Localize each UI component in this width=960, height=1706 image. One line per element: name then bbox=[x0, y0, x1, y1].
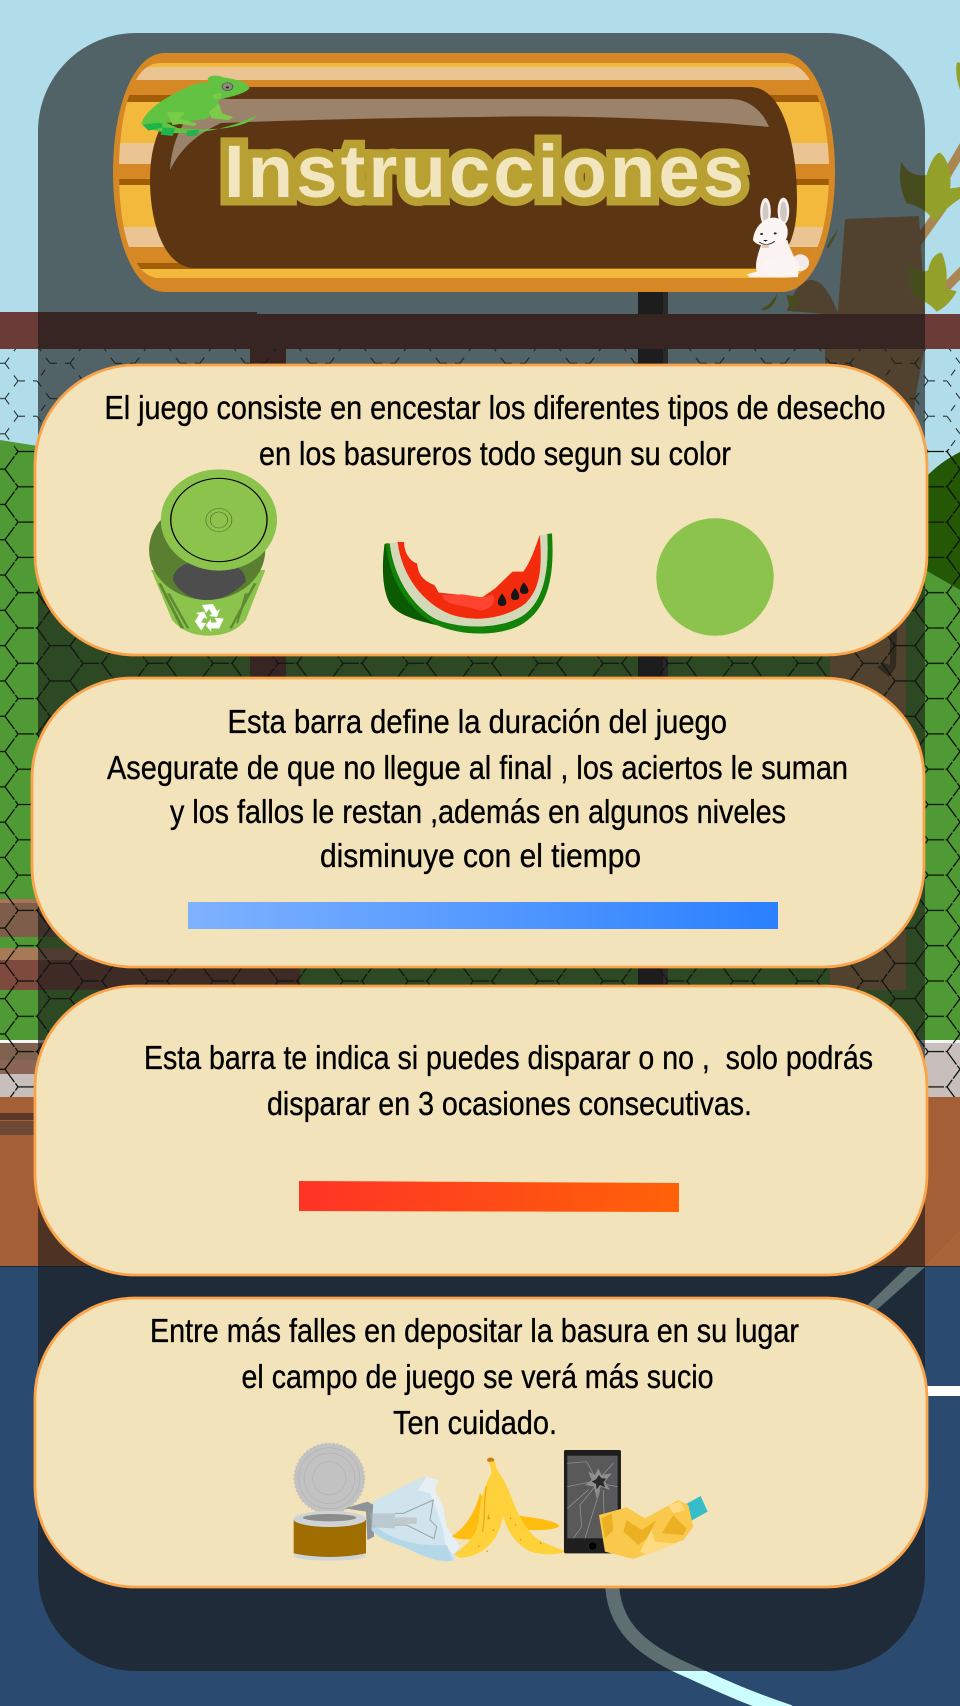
sign frame bbox=[113, 53, 835, 292]
panel box bbox=[35, 1298, 927, 1587]
blue time bar bbox=[188, 902, 778, 929]
sign stripes bbox=[119, 63, 829, 278]
court wall bands bbox=[0, 1040, 960, 1097]
title sign bbox=[100, 53, 860, 292]
fence posts bbox=[250, 292, 668, 1048]
instruction text: Entre más falles en depositar la basura en su lugar bbox=[150, 1313, 799, 1350]
icon: green circle bbox=[656, 518, 774, 636]
title text: Instrucciones bbox=[224, 130, 744, 213]
instruction text bbox=[150, 1313, 799, 1442]
icon: crushed plastic bottle bbox=[599, 1496, 708, 1559]
icon: broken light bulb bbox=[345, 1477, 460, 1561]
sign brown plate bbox=[150, 87, 797, 268]
instruction text bbox=[107, 704, 848, 875]
panel: game goal bbox=[35, 365, 927, 655]
plate highlight bbox=[170, 99, 769, 170]
red shot bar bbox=[299, 1181, 679, 1212]
blue court floor bbox=[0, 1266, 960, 1706]
icon: green recycling bin bbox=[149, 469, 277, 636]
tree with leaves bbox=[452, 62, 960, 990]
instruction text: Asegurate de que no llegue al final , los aciertos le suman bbox=[107, 750, 848, 787]
instruction text: Ten cuidado. bbox=[393, 1405, 557, 1442]
instruction text: el campo de juego se verá más sucio bbox=[242, 1359, 714, 1396]
icon: watermelon slice bbox=[383, 533, 553, 634]
instruction text: Esta barra define la duración del juego bbox=[228, 704, 727, 741]
instruction text bbox=[104, 390, 886, 473]
panel: dirty field warning bbox=[35, 1298, 927, 1587]
panel: shot bar bbox=[35, 986, 927, 1275]
ground green bbox=[0, 440, 960, 1040]
instruction text: disparar en 3 ocasiones consecutivas. bbox=[267, 1086, 752, 1123]
instruction text: en los basureros todo segun su color bbox=[259, 436, 731, 473]
hexagon wire net bbox=[0, 349, 960, 1097]
panel box bbox=[32, 678, 924, 967]
icon: rabbit bbox=[747, 198, 809, 277]
instruction text bbox=[144, 1040, 873, 1123]
instruction text: disminuye con el tiempo bbox=[320, 838, 641, 875]
brown wall bbox=[0, 1097, 960, 1267]
panel box bbox=[35, 986, 927, 1275]
instruction text: y los fallos le restan ,además en algunos niveles bbox=[170, 794, 786, 831]
icon: broken phone bbox=[564, 1450, 621, 1553]
panel: time bar bbox=[32, 678, 924, 967]
fence boards left bbox=[0, 899, 300, 990]
wooden rail bbox=[0, 312, 960, 349]
icon: banana peel bbox=[452, 1458, 566, 1558]
icon: iguana bbox=[141, 76, 258, 136]
panel box bbox=[35, 365, 927, 655]
icon: open tin can bbox=[293, 1443, 366, 1561]
